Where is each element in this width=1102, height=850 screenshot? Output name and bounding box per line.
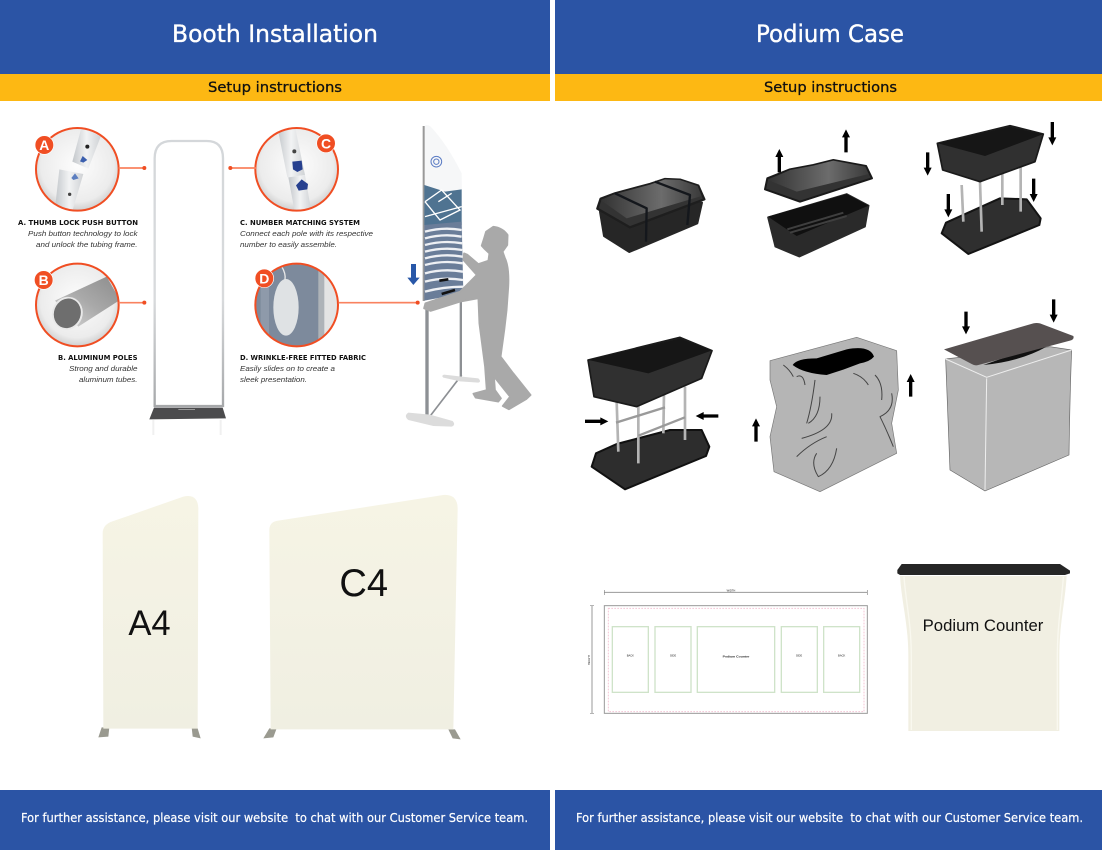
text A: thumb lock push button: and unlock the tubing frame.: [36, 240, 138, 249]
template diagram: BACK: [838, 654, 846, 658]
template diagram: [587, 589, 867, 713]
panel: booth installation: [0, 0, 550, 850]
callout circle C: number matching: C: [321, 135, 331, 151]
text B: aluminum poles: aluminum tubes.: [79, 375, 138, 384]
podium counter: [897, 564, 1070, 731]
text C: number matching system: Connect each pole with its respective: [240, 229, 373, 238]
panel: podium case: [555, 0, 1102, 850]
callout circle A: thumb lock: A: [39, 137, 49, 153]
step row one: [597, 122, 1056, 257]
callout circle B: aluminum pole: B: [39, 272, 49, 288]
text D: wrinkle-free fitted fabric: [240, 354, 366, 384]
tube frame and base: [149, 141, 226, 435]
banner fabric: [423, 125, 463, 301]
step 2: open case: [765, 129, 872, 257]
text C: number matching system: C. NUMBER MATCHING SYSTEM: [240, 219, 360, 227]
callout circle C: number matching: [255, 127, 338, 213]
step 4: cross bars: [585, 337, 718, 489]
banner stand A4: [98, 496, 201, 738]
podium counter: Podium Counter: [923, 616, 1044, 635]
template diagram: SIDE: [670, 653, 676, 657]
text C: number matching system: [240, 219, 373, 249]
connector line to banner: [380, 301, 420, 305]
banner with person: [380, 125, 531, 427]
step 3: insert poles: [924, 122, 1056, 254]
text B: aluminum poles: [58, 354, 138, 384]
connector lines: [119, 166, 418, 305]
text D: wrinkle-free fitted fabric: D. WRINKLE-FREE FITTED FABRIC: [240, 354, 366, 362]
step 1: closed case: [597, 179, 704, 252]
step 6: fitted cover with lid: [944, 299, 1074, 491]
step row two: [585, 299, 1074, 492]
banner stand C4: [263, 495, 461, 739]
text D: wrinkle-free fitted fabric: sleek presentation.: [240, 375, 307, 384]
banner stand C4: C4: [339, 562, 388, 605]
title bar: Podium Case: Podium Case: [756, 20, 904, 48]
callout circle D: fitted fabric: D: [259, 270, 269, 286]
template diagram: Podium Counter: [723, 654, 749, 658]
subtitle bar: setup instructions: [0, 74, 550, 101]
template diagram: WIDTH: [727, 589, 735, 593]
icon: blue down arrow: [407, 264, 420, 285]
template diagram: SIDE: [796, 654, 802, 658]
title bar: Podium Case: [555, 0, 1102, 74]
text C: number matching system: number to easily assemble.: [240, 240, 337, 249]
callout circle D: fitted fabric: [255, 263, 338, 347]
banner poles and feet: [406, 300, 480, 427]
footer bar: For further assistance, please visit our website to chat with our Customer Service team.: [21, 810, 528, 825]
callout circle A: thumb lock: [35, 127, 119, 213]
title bar: Booth Installation: Booth Installation: [172, 20, 378, 48]
text A: thumb lock push button: [18, 219, 139, 249]
step 5: fabric cover: [752, 337, 915, 492]
text D: wrinkle-free fitted fabric: Easily slides on to create a: [240, 364, 335, 373]
text A: thumb lock push button: A. THUMB LOCK PUSH BUTTON: [18, 219, 138, 227]
callout circle B: aluminum pole: [34, 264, 120, 346]
template diagram: BACK: [627, 654, 634, 658]
footer bar: [555, 790, 1102, 850]
subtitle bar: setup instructions: Setup instructions: [208, 80, 342, 96]
callouts diagram: [34, 127, 418, 435]
text A: thumb lock push button: Push button technology to lock: [28, 229, 139, 238]
banner stand A4: A4: [128, 604, 171, 643]
person silhouette: [424, 227, 531, 409]
title bar: Booth Installation: [0, 0, 550, 74]
footer bar: [0, 790, 550, 850]
subtitle bar: setup instructions: Setup instructions: [764, 80, 897, 96]
subtitle bar: setup instructions: [555, 74, 1102, 101]
text B: aluminum poles: B. ALUMINUM POLES: [58, 354, 138, 362]
text B: aluminum poles: Strong and durable: [69, 364, 138, 373]
template diagram: HEIGHT: [587, 655, 591, 665]
